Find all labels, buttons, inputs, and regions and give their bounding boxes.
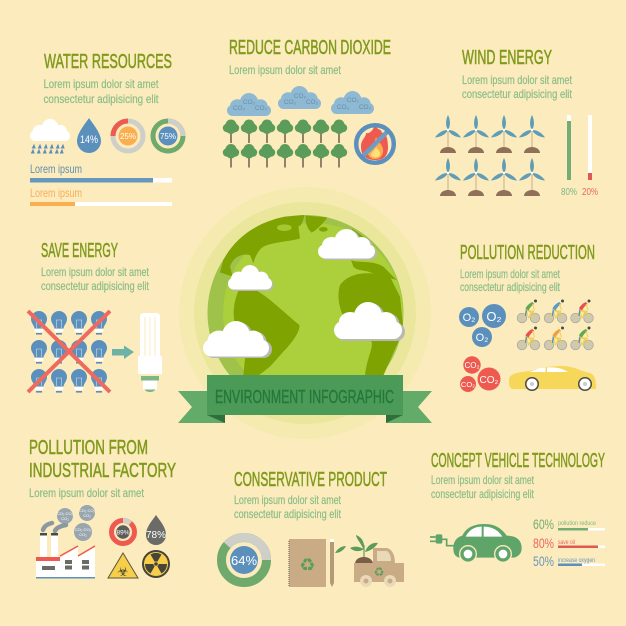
stat: increase oxygen 50%: [533, 553, 605, 569]
icon: rain cloud: [30, 119, 70, 153]
panel: reduce carbon dioxide: [223, 36, 394, 168]
icon: CO2 clouds: [227, 86, 374, 116]
text block: consectetur adipisicing elit: [41, 279, 150, 293]
text block: Lorem ipsum dolor sit amet: [41, 265, 149, 279]
progress bar: orange: [30, 186, 172, 206]
text block: consectetur adipisicing elit: [431, 487, 534, 501]
stat: pollution reduce 60%: 60%: [533, 516, 554, 532]
progress bar: blue: Lorem ipsum: [30, 162, 82, 176]
clouds: [203, 229, 405, 358]
icon: energy-saving bulb: [138, 313, 162, 392]
heading: pollution from industrial factory: [29, 436, 176, 482]
icon: yellow car: [509, 366, 596, 391]
heading: save energy: SAVE ENERGY: [41, 239, 118, 262]
heading: water resources: WATER RESOURCES: [44, 50, 172, 73]
donut chart 64%: [222, 537, 267, 582]
text block: Lorem ipsum dolor sit amet: [234, 493, 341, 507]
icon: crossed-out bulbs: [28, 311, 110, 393]
text block: consectetur adipisicing elit: [460, 280, 560, 294]
text block: consectetur adipisicing elit: [462, 87, 573, 101]
donut chart 25%: [113, 121, 143, 151]
arrow: [112, 346, 134, 359]
progress bar: orange: Lorem ipsum: [30, 186, 82, 200]
icon: recycled notebook: [289, 539, 326, 587]
bar chart: 80%: [561, 115, 577, 198]
icon: CO2 clouds: CO₂: [255, 105, 268, 112]
icon: cyclists: [517, 300, 593, 350]
icon: biohazard sign: [108, 553, 138, 580]
title: ENVIRONMENT INFOGRAPHIC: [215, 387, 394, 407]
icon: carbon dioxide bubbles: CO₂: [480, 375, 499, 386]
icon: carbon dioxide bubbles: CO₂: [461, 380, 475, 389]
text block: Lorem ipsum dolor sit amet: [431, 473, 534, 487]
text block: [431, 473, 534, 501]
text block: Lorem ipsum dolor sit amet: [460, 267, 560, 281]
icon: factory: [36, 523, 95, 578]
icon: oil drop 78%: 78%: [146, 530, 166, 541]
donut chart 89%: 89%: [116, 530, 130, 536]
icon: recycled notebook: ♻: [299, 555, 316, 576]
icon: truck with plant: [350, 535, 404, 587]
icon: pollution bubbles: CO₂ CO₂: [75, 527, 92, 532]
icon: pencil with leaf: [330, 539, 346, 587]
icon: oxygen bubbles: O₂: [476, 332, 488, 344]
panel: save energy: [28, 239, 162, 393]
icon: CO2 clouds: CO₂: [337, 104, 350, 111]
icon: no fire: [356, 125, 394, 163]
icon: pollution bubbles: CO₂ CO₂: [79, 508, 96, 513]
icon: oxygen bubbles: [459, 304, 506, 347]
text block: Lorem ipsum dolor sit amet: [229, 63, 342, 77]
stat: save oil 80%: [533, 535, 605, 551]
bar chart: 80%: 80%: [561, 187, 577, 198]
text block: [41, 265, 150, 293]
icon: pollution bubbles: [57, 505, 96, 541]
icon: CO2 clouds: CO₂: [306, 99, 319, 106]
heading: conservative product: CONSERVATIVE PRODUCT: [234, 468, 387, 491]
text block: Lorem ipsum dolor sit amet: [44, 77, 159, 91]
icon: rows of trees: [223, 120, 347, 168]
bar chart: 20%: [582, 115, 598, 198]
icon: oxygen bubbles: O₂: [486, 309, 502, 324]
stat: save oil 80%: 80%: [533, 535, 554, 551]
stat: pollution reduce 60%: pollution reduce: [558, 520, 596, 527]
stat: increase oxygen 50%: 50%: [533, 553, 554, 569]
icon: water drop 14%: [77, 118, 101, 153]
text block: Lorem ipsum dolor sit amet: [29, 486, 145, 500]
globe with halos: [179, 187, 431, 439]
icon: pollution bubbles: CO₂: [79, 532, 87, 537]
panel: concept vehicle technology: [430, 449, 605, 569]
stat: pollution reduce 60%: [533, 516, 605, 532]
globe land masses: [220, 215, 403, 376]
donut chart 75%: 75%: [160, 132, 176, 141]
panel: wind energy: [434, 46, 598, 198]
text block: [234, 493, 342, 521]
donut chart 25%: 25%: [120, 132, 136, 141]
text block: Lorem ipsum dolor sit amet: [462, 73, 572, 87]
bar chart: 20%: 20%: [582, 187, 598, 198]
icon: CO2 clouds: CO₂: [359, 104, 372, 111]
icon: CO2 clouds: CO₂: [233, 105, 246, 112]
icon: CO2 clouds: CO₂: [284, 99, 297, 106]
heading: reduce carbon dioxide: REDUCE CARBON DIOXIDE: [229, 36, 391, 59]
icon: pollution bubbles: CO₂: [83, 513, 91, 518]
panel: conservative product: [222, 468, 404, 587]
icon: pollution bubbles: CO₂: [61, 516, 69, 521]
text block: [460, 267, 560, 294]
text block: [462, 73, 573, 101]
text block: consectetur adipisicing elit: [234, 507, 342, 521]
icon: carbon dioxide bubbles: CO₂: [464, 361, 480, 370]
title ribbon: [178, 375, 432, 423]
icon: water drop 14%: 14%: [80, 134, 98, 146]
donut chart 64%: 64%: [231, 553, 257, 568]
panel: water resources: [30, 50, 183, 206]
heading: wind energy: WIND ENERGY: [462, 46, 552, 69]
donut chart 75%: [153, 121, 183, 151]
stat: increase oxygen 50%: increase oxygen: [558, 557, 595, 564]
icon: carbon dioxide bubbles: [460, 356, 500, 392]
icon: oxygen bubbles: O₂: [463, 312, 475, 324]
icon: wind turbines: [434, 115, 546, 196]
icon: biohazard sign: ☣: [117, 565, 129, 580]
text block: [44, 77, 159, 106]
panel: pollution from industrial factory: [29, 436, 176, 580]
icon: radiation sign: [143, 551, 169, 577]
heading: pollution from industrial factory: INDUSTRIAL FACTORY: [29, 459, 176, 482]
donut chart 89%: [112, 520, 134, 544]
progress bar: blue: [30, 162, 172, 182]
icon: CO2 clouds: CO₂: [347, 97, 360, 104]
icon: CO2 clouds: CO₂: [243, 99, 256, 106]
panel: pollution reduction: [459, 241, 596, 392]
stat: save oil 80%: save oil: [558, 539, 575, 546]
text block: consectetur adipisicing elit: [44, 92, 159, 106]
icon: pollution bubbles: CO₂ CO₂: [57, 511, 74, 516]
icon: electric car: [430, 524, 522, 563]
icon: truck with plant: ♻: [374, 565, 384, 579]
icon: CO2 clouds: CO₂: [294, 93, 307, 100]
icon: oil drop 78%: [146, 515, 166, 545]
heading: pollution from industrial factory: POLLUTION FROM: [29, 436, 148, 459]
